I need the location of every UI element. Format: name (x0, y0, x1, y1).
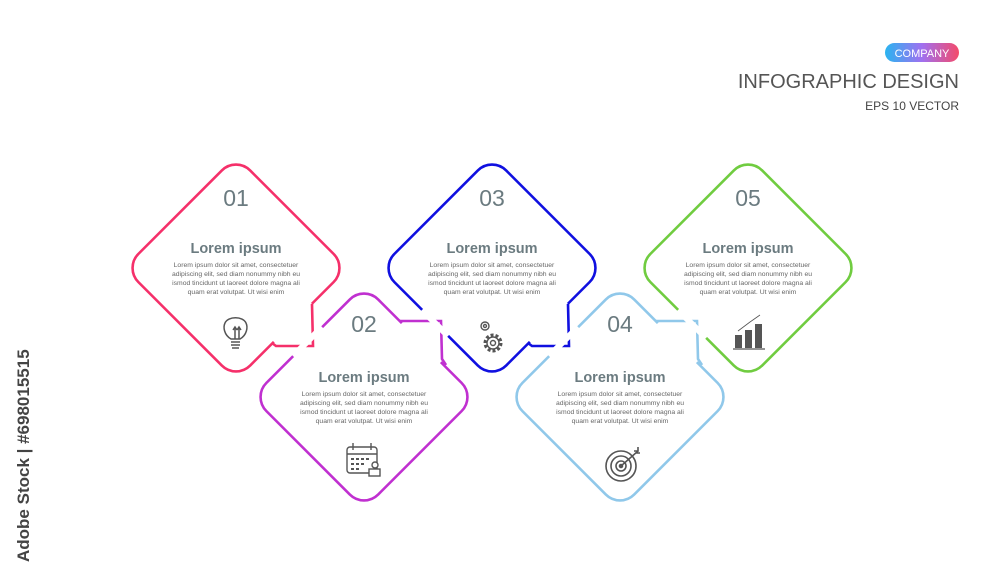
text: 05: adipiscing elit, sed diam nonummy nibh eu (684, 271, 812, 278)
text: 03: ismod tincidunt ut laoreet dolore magna ali (428, 280, 556, 287)
text: 03 (428, 185, 556, 296)
text: 02: quam erat volutpat. Ut wisi enim (316, 418, 413, 425)
text: 02: ismod tincidunt ut laoreet dolore magna ali (300, 409, 428, 416)
text: 04: 04 (607, 311, 633, 337)
text: 04: Lorem ipsum (574, 370, 666, 386)
text: 03: 03 (479, 185, 505, 211)
text: 01: Lorem ipsum dolor sit amet, consectetuer (174, 262, 299, 269)
text: 02: 02 (351, 311, 377, 337)
text: 05: quam erat volutpat. Ut wisi enim (700, 289, 797, 296)
badge: company (885, 43, 959, 62)
text: 03: Lorem ipsum dolor sit amet, consectetuer (430, 262, 555, 269)
text: 02 (300, 311, 428, 425)
text: 04: ismod tincidunt ut laoreet dolore magna ali (556, 409, 684, 416)
text: 02: Lorem ipsum dolor sit amet, consectetuer (302, 391, 427, 398)
text: 04: Lorem ipsum dolor sit amet, consectetuer (558, 391, 683, 398)
text: 05: ismod tincidunt ut laoreet dolore magna ali (684, 280, 812, 287)
panel: 01 (124, 156, 348, 380)
icon: calendar with person (347, 443, 380, 476)
panel: 05 (636, 156, 860, 380)
text: 03: adipiscing elit, sed diam nonummy nibh eu (428, 271, 556, 278)
text: 01: ismod tincidunt ut laoreet dolore magna ali (172, 280, 300, 287)
text: 05: 05 (735, 185, 761, 211)
text: 04: quam erat volutpat. Ut wisi enim (572, 418, 669, 425)
text: 03: quam erat volutpat. Ut wisi enim (444, 289, 541, 296)
text: 01: quam erat volutpat. Ut wisi enim (188, 289, 285, 296)
text: 05: Lorem ipsum (702, 241, 794, 257)
text: 05: Lorem ipsum dolor sit amet, consectetuer (686, 262, 811, 269)
text: 02: adipiscing elit, sed diam nonummy nibh eu (300, 400, 428, 407)
panel: 04 (508, 285, 732, 509)
badge: company: COMPANY (895, 48, 950, 60)
text: 01 (172, 185, 300, 296)
watermark: vertical stock id: Adobe Stock | #698015515 (14, 349, 33, 562)
text: 04: adipiscing elit, sed diam nonummy nibh eu (556, 400, 684, 407)
icon: target (606, 447, 640, 481)
subtitle: EPS 10 VECTOR (865, 99, 959, 113)
text: 04 (556, 311, 684, 425)
panel: 03 (380, 156, 604, 380)
panel: 02 (252, 285, 476, 509)
text: 03: Lorem ipsum (446, 241, 538, 257)
text: 01: Lorem ipsum (190, 241, 282, 257)
text: 05 (684, 185, 812, 296)
icon: bar chart (733, 315, 765, 349)
text: 01: 01 (223, 185, 249, 211)
icon: gears (481, 322, 501, 351)
text: 01: adipiscing elit, sed diam nonummy nibh eu (172, 271, 300, 278)
text: 02: Lorem ipsum (318, 370, 410, 386)
title: INFOGRAPHIC DESIGN (738, 71, 959, 93)
icon: light bulb (224, 318, 247, 348)
